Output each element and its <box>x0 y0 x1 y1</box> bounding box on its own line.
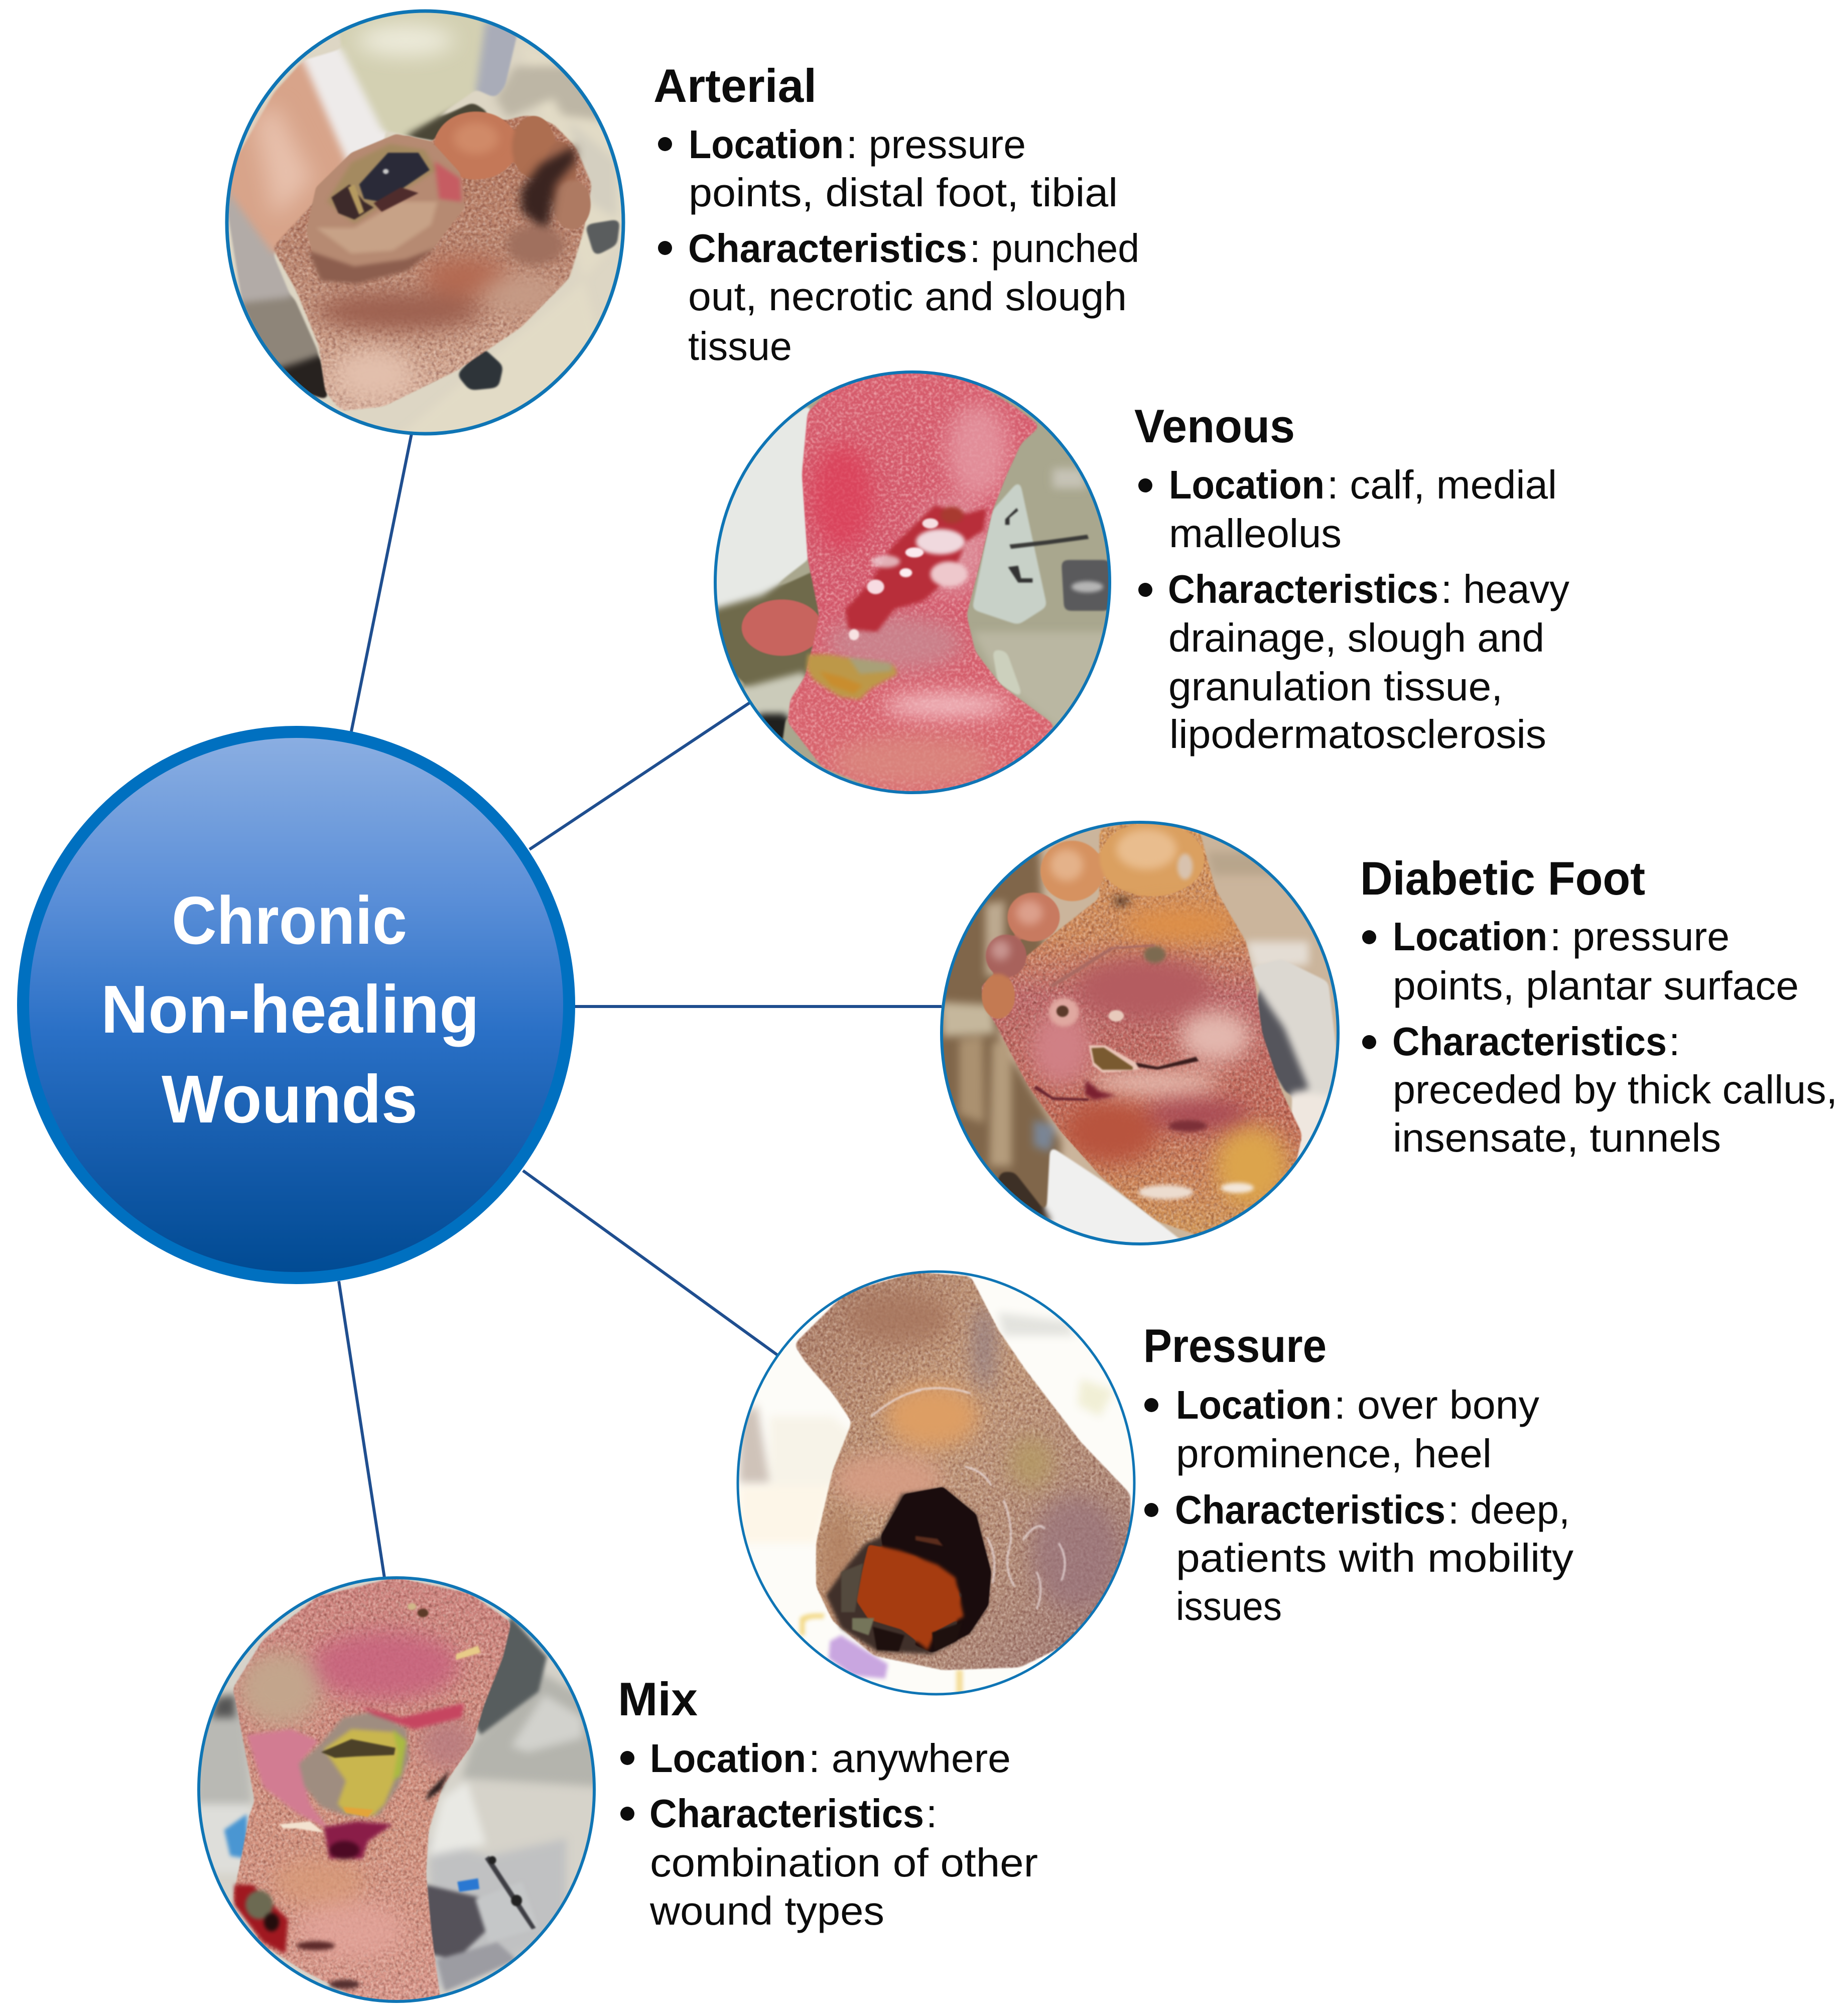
photo ring <box>199 1578 594 2001</box>
bullet: characteristics: insensate, tunnels <box>1393 1115 1721 1160</box>
hub title <box>101 883 479 1137</box>
bullet: location <box>658 122 1118 215</box>
photo: pressure heel <box>739 1273 1132 1692</box>
bullet: characteristics: preceded by thick callus, <box>1393 1067 1837 1112</box>
bullet: characteristics: out, necrotic and slough <box>688 274 1127 319</box>
bullet: characteristics: granulation tissue, <box>1168 664 1503 709</box>
bullet: characteristics: Characteristics <box>1392 1019 1667 1064</box>
bullet: characteristics: wound types <box>649 1888 884 1933</box>
bullet: location <box>1144 1382 1539 1476</box>
bullet: characteristics <box>620 1791 1038 1933</box>
hub title: Non-healing <box>101 971 479 1047</box>
bullet: characteristics <box>658 226 1139 368</box>
bullet: location: : anywhere <box>809 1736 1011 1781</box>
heading: Venous: Venous <box>1134 400 1295 452</box>
hub title: Wounds <box>162 1061 418 1137</box>
photo: diabetic foot sole <box>943 824 1337 1242</box>
heading: Pressure: Pressure <box>1143 1319 1327 1372</box>
panel: mix <box>181 1556 1038 2008</box>
bullet: location: Location <box>689 122 844 167</box>
bullet: location: points, plantar surface <box>1393 963 1799 1008</box>
bullet: characteristics: tissue <box>688 324 792 368</box>
bullet: location: : pressure <box>846 122 1026 167</box>
bullet: characteristics: lipodermatosclerosis <box>1169 712 1546 757</box>
heading: Mix: Mix <box>618 1673 698 1725</box>
panel: pressure <box>723 1255 1573 1707</box>
bullet: characteristics: Characteristics <box>1168 567 1438 611</box>
bullet: characteristics <box>1144 1487 1573 1628</box>
bullet: characteristics: combination of other <box>650 1840 1038 1885</box>
bullet: characteristics <box>1362 1019 1837 1160</box>
bullet: characteristics: patients with mobility <box>1176 1536 1573 1580</box>
bullet: location: Location <box>1176 1382 1332 1427</box>
bullet: location: : pressure <box>1550 914 1730 959</box>
bullet: characteristics: : <box>926 1791 937 1836</box>
bullet: location <box>620 1736 1011 1781</box>
photo ring <box>227 11 623 434</box>
bullet: location: Location <box>1169 462 1325 507</box>
bullet: characteristics: : deep, <box>1448 1487 1570 1532</box>
bullet: location: malleolus <box>1169 511 1342 556</box>
bullet: characteristics: : heavy <box>1441 567 1569 611</box>
photo: arterial foot <box>229 13 621 432</box>
bullet: location: : calf, medial <box>1327 462 1557 507</box>
hub title: Chronic <box>172 883 407 958</box>
bullet: location: points, distal foot, tibial <box>689 170 1118 215</box>
panel: venous <box>693 361 1569 803</box>
bullet: location: Location <box>650 1736 806 1781</box>
bullet: characteristics: drainage, slough and <box>1168 615 1544 660</box>
photo ring <box>738 1272 1134 1694</box>
bullet: characteristics: : punched <box>970 226 1139 271</box>
bullet: location <box>1138 462 1557 556</box>
bullet: characteristics: Characteristics <box>649 1791 924 1836</box>
bullet: characteristics: Characteristics <box>688 226 967 271</box>
panel: arterial <box>201 0 1139 452</box>
connector lines from hub to wound types <box>339 434 942 1578</box>
photo: venous leg <box>717 373 1108 791</box>
bullet: characteristics: issues <box>1176 1584 1282 1628</box>
panel: diabetic foot <box>923 803 1837 1255</box>
heading: Diabetic Foot: Diabetic Foot <box>1360 852 1645 905</box>
bullet: characteristics: Characteristics <box>1175 1487 1445 1532</box>
photo ring <box>942 822 1338 1244</box>
photo: mixed wound leg <box>181 1556 612 2008</box>
central hub: Chronic Non-healing Wounds <box>23 732 569 1278</box>
bullet: location: : over bony <box>1334 1382 1539 1427</box>
bullet: characteristics: : <box>1669 1019 1680 1064</box>
heading: Arterial: Arterial <box>653 59 817 112</box>
bullet: location: prominence, heel <box>1176 1431 1492 1476</box>
bullet: location <box>1362 914 1799 1008</box>
bullet: characteristics <box>1138 567 1569 757</box>
bullet: location: Location <box>1393 914 1547 959</box>
photo ring <box>715 372 1110 793</box>
